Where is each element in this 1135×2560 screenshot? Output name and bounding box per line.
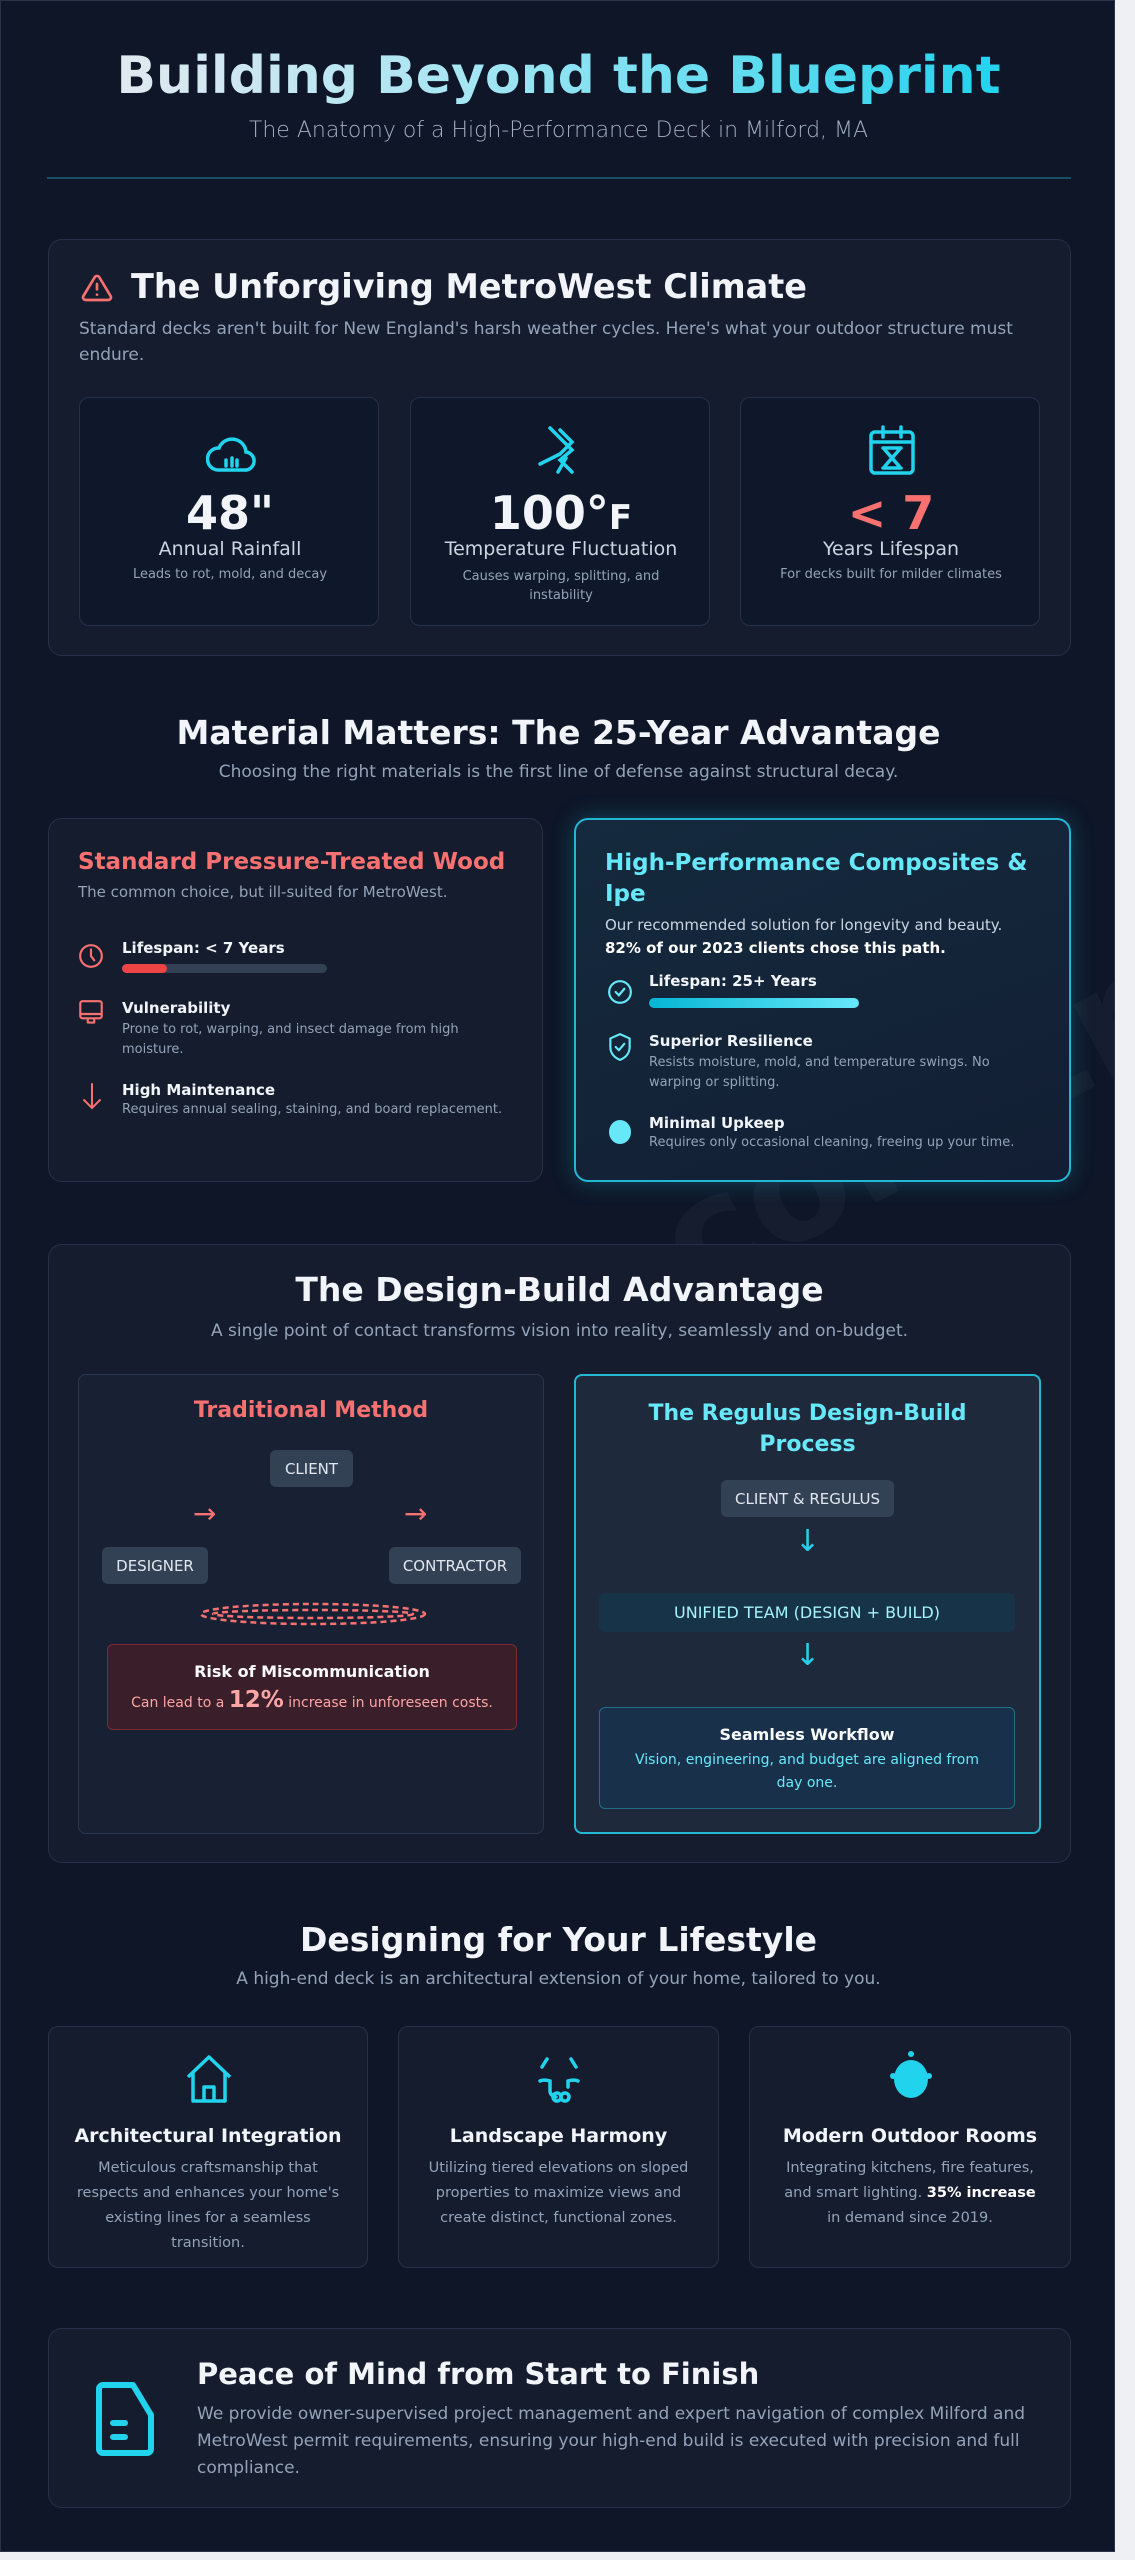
callout: seamless: Vision, engineering, and budget are aligned from day one. — [635, 1752, 979, 1791]
panel: design-build: A single point of contact transforms vision into reality, seamlessly and on-budget. — [211, 1321, 908, 1341]
card: architectural: Architectural Integration — [74, 2125, 342, 2147]
card: temperature: Causes warping, splitting, and instability — [463, 569, 659, 603]
card: lifespan: For decks built for milder climates — [780, 567, 1002, 582]
item: upkeep: Requires only occasional cleaning, freeing up your time. — [649, 1135, 1014, 1150]
panel: composites: 82% of our 2023 clients chose this path. — [605, 939, 946, 957]
traditional method: Traditional Method — [194, 1398, 428, 1423]
icon: calendar — [869, 425, 915, 475]
panel: composites: Our recommended solution for longevity and beauty. — [605, 916, 1002, 934]
item: lifespan — [608, 972, 859, 1008]
callout: seamless: Seamless Workflow — [719, 1725, 895, 1744]
icon: document — [96, 2382, 154, 2456]
item: maintenance: Requires annual sealing, staining, and board replacement. — [122, 1102, 502, 1117]
regulus process: UNIFIED TEAM (DESIGN + BUILD) — [674, 1603, 940, 1622]
panel: peace of mind: Peace of Mind from Start to Finish — [197, 2357, 759, 2391]
panel: standard wood: Standard Pressure-Treated Wood — [78, 849, 505, 875]
card: temperature: 100°F — [490, 486, 632, 540]
traditional method: → — [404, 1497, 427, 1530]
card: outdoor rooms: Integrating kitchens, fire features, and smart lighting. 35% increase in demand since 2019. — [784, 2160, 1036, 2226]
item: vulnerability: Prone to rot, warping, and insect damage from high moisture. — [122, 1022, 459, 1057]
icon: warning — [82, 274, 112, 302]
item: lifespan — [79, 939, 327, 973]
card: outdoor rooms — [749, 2026, 1071, 2268]
card: rainfall — [79, 397, 379, 626]
regulus process: The Regulus Design-Build — [648, 1401, 967, 1426]
item: vulnerability — [79, 999, 459, 1057]
callout: seamless — [599, 1707, 1015, 1809]
card: outdoor rooms: Modern Outdoor Rooms — [783, 2125, 1037, 2147]
callout: risk: Can lead to a 12% increase in unforeseen costs. — [131, 1687, 493, 1713]
card: landscape: Landscape Harmony — [450, 2125, 667, 2147]
text: Standard decks aren't built for New England's harsh weather cycles. Here's what your outdoor structure must endure. — [79, 319, 1013, 365]
card: rainfall: Annual Rainfall — [159, 538, 301, 560]
card: rainfall: Leads to rot, mold, and decay — [133, 567, 327, 582]
panel: standard wood — [48, 818, 543, 1182]
card: architectural: Meticulous craftsmanship that respects and enhances your home's existing lines for a seamless transition. — [77, 2160, 339, 2251]
callout: risk — [107, 1644, 517, 1730]
panel: composites — [574, 818, 1071, 1182]
regulus process: CLIENT & REGULUS — [735, 1490, 880, 1508]
card: architectural — [48, 2026, 368, 2268]
regulus process: Process — [759, 1432, 856, 1457]
icon: cloud rain — [206, 437, 256, 472]
subtitle: The Anatomy of a High-Performance Deck in Milford, MA — [249, 118, 868, 143]
icon: dashed ellipse — [200, 1602, 426, 1626]
item: resilience — [609, 1032, 990, 1090]
item: vulnerability: Vulnerability — [122, 999, 230, 1017]
regulus process: ↓ — [795, 1638, 820, 1673]
card: rainfall: 48" — [186, 486, 274, 540]
item: lifespan: Lifespan: 25+ Years — [649, 972, 817, 990]
traditional method: CLIENT — [285, 1460, 338, 1478]
card: landscape: Utilizing tiered elevations on sloped properties to maximize views and create distinct, functional zones. — [429, 2160, 688, 2226]
item: resilience: Superior Resilience — [649, 1032, 813, 1050]
item: lifespan: Lifespan: < 7 Years — [122, 939, 285, 957]
item: upkeep: Minimal Upkeep — [649, 1114, 785, 1132]
panel: design-build — [48, 1244, 1071, 1863]
panel: climate — [48, 239, 1071, 656]
traditional method: CONTRACTOR — [403, 1556, 507, 1574]
heading: The Unforgiving MetroWest Climate — [131, 267, 807, 306]
panel: composites: High-Performance Composites & Ipe — [605, 850, 1027, 907]
panel: peace of mind: We provide owner-supervised project management and expert navigation of complex Milford and MetroWest permit requirements, ensuring your high-end build is executed with precision and full compliance. — [197, 2404, 1025, 2478]
card: landscape — [398, 2026, 719, 2268]
card: temperature: Temperature Fluctuation — [445, 538, 677, 560]
panel: peace of mind — [48, 2328, 1071, 2508]
heading: material: Material Matters: The 25-Year Advantage — [177, 713, 940, 752]
card: lifespan: < 7 — [848, 486, 934, 540]
panel: standard wood: The common choice, but ill-suited for MetroWest. — [78, 883, 447, 901]
heading: lifestyle: Designing for Your Lifestyle — [300, 1920, 817, 1959]
traditional method: → — [193, 1497, 216, 1530]
item: resilience: Resists moisture, mold, and temperature swings. No warping or splitting. — [649, 1055, 990, 1090]
subheading: A high-end deck is an architectural extension of your home, tailored to you. — [236, 1969, 881, 1989]
traditional method — [78, 1374, 544, 1834]
callout: risk: Risk of Miscommunication — [194, 1662, 430, 1681]
title: Building Beyond the Blueprint — [116, 46, 1001, 106]
icon: temperature — [538, 426, 574, 474]
traditional method: DESIGNER — [116, 1556, 194, 1574]
regulus process — [574, 1374, 1041, 1834]
item: maintenance: High Maintenance — [122, 1081, 275, 1099]
item: upkeep — [609, 1114, 1014, 1150]
card: temperature — [410, 397, 710, 626]
card: lifespan: Years Lifespan — [823, 538, 959, 560]
card: lifespan — [740, 397, 1040, 626]
subheading: Choosing the right materials is the first line of defense against structural decay. — [219, 762, 898, 782]
panel: design-build: The Design-Build Advantage — [295, 1270, 824, 1309]
item: maintenance — [83, 1081, 502, 1117]
regulus process: ↓ — [795, 1524, 820, 1559]
